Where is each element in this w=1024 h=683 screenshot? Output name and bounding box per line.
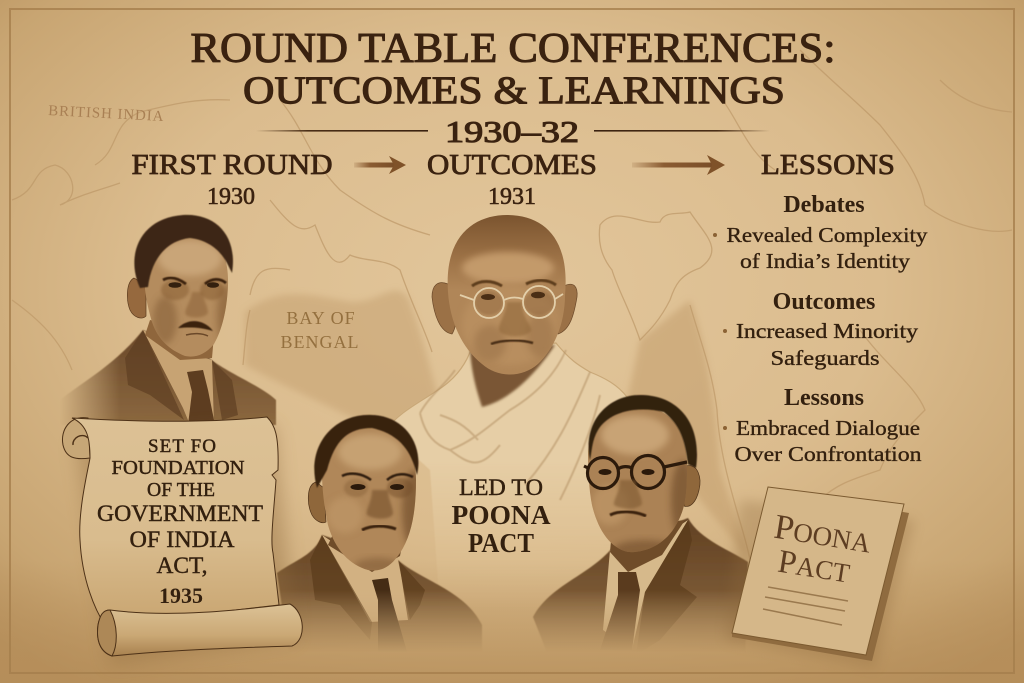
arrow: outcomes to lessons	[632, 155, 725, 175]
head	[588, 407, 687, 552]
callout: Led to Poona Pact: LED TO	[459, 475, 543, 500]
scroll text: 1935	[159, 583, 203, 608]
face highlights and shadows	[158, 240, 222, 276]
document lines	[763, 587, 848, 625]
head	[448, 215, 566, 374]
face highlights and shadows	[338, 434, 402, 470]
moustache and mouth	[178, 321, 213, 331]
date subtitle with rules: 1930–32	[445, 114, 579, 149]
lesson: debates: of India’s Identity	[740, 249, 911, 273]
map label: Bay of Bengal: BENGAL	[280, 332, 360, 352]
callout: Led to Poona Pact: POONA	[452, 500, 551, 530]
map label: Bay of Bengal	[280, 308, 360, 352]
face highlights and shadows	[601, 415, 669, 455]
lesson: lessons	[723, 385, 922, 466]
neck	[610, 520, 685, 572]
scroll text: FOUNDATION	[112, 457, 244, 479]
scroll text	[97, 436, 263, 608]
portrait: Gandhi	[394, 215, 627, 543]
column heading: First Round: FIRST ROUND	[132, 149, 332, 181]
neck	[145, 320, 214, 360]
map label: British India: BRITISH INDIA	[48, 103, 165, 125]
hair	[589, 395, 697, 468]
column heading: Outcomes	[427, 149, 597, 210]
suit	[60, 330, 276, 425]
hair	[134, 215, 233, 288]
ear	[308, 482, 326, 523]
portrait: First Round delegate	[60, 215, 276, 425]
scroll text: OF INDIA	[130, 527, 235, 552]
brows and eyes	[342, 474, 413, 480]
document front page	[732, 487, 904, 655]
shirt and collar	[143, 330, 214, 425]
hair	[314, 415, 418, 488]
map label: Bay of Bengal: BAY OF	[286, 308, 356, 328]
map shading: right landmass	[625, 300, 750, 560]
callout: Led to Poona Pact	[452, 475, 551, 558]
document: Poona Pact	[725, 487, 915, 668]
eyes	[598, 469, 612, 475]
document back page	[732, 490, 909, 661]
scroll shadow	[75, 425, 295, 665]
lesson: lessons: Lessons	[784, 385, 864, 411]
lapels	[310, 535, 425, 640]
top curl	[62, 418, 90, 459]
scroll: Government of India Act	[62, 417, 302, 665]
column heading: First Round	[132, 149, 332, 210]
column heading: Outcomes: 1931	[488, 184, 536, 210]
portrait: left delegate	[277, 415, 482, 660]
document shadow	[725, 500, 915, 668]
glasses	[460, 286, 563, 318]
nose and mouth	[367, 490, 393, 519]
ear	[684, 466, 700, 506]
column heading: Lessons: LESSONS	[761, 149, 895, 181]
lesson: outcomes	[723, 289, 919, 370]
nose and mouth	[499, 302, 531, 336]
lesson: outcomes: Outcomes	[773, 289, 875, 315]
head	[144, 230, 228, 357]
map shading: Bay of Bengal region	[245, 291, 448, 440]
tie	[187, 370, 214, 421]
glasses	[584, 456, 687, 488]
nose and mouth	[614, 480, 642, 509]
lesson: debates: Revealed Complexity	[726, 223, 928, 247]
portrait: right delegate	[533, 395, 748, 660]
lesson: lessons: Over Confrontation	[734, 442, 922, 466]
bottom roll	[98, 604, 302, 656]
title: ROUND TABLE CONFERENCES:	[190, 26, 836, 72]
faded map of India	[12, 50, 1012, 560]
shirt	[322, 535, 408, 622]
brows and eyes	[163, 278, 226, 284]
ears	[432, 283, 456, 334]
lessons list	[713, 192, 928, 466]
lapels	[125, 330, 238, 420]
tie	[372, 578, 404, 644]
document title: POONA	[772, 507, 874, 561]
lesson: outcomes: Safeguards	[770, 346, 880, 370]
scroll text: SET FO	[148, 436, 216, 457]
lapels	[639, 520, 697, 636]
document title: PACT	[775, 544, 853, 591]
neck	[328, 530, 405, 572]
face highlights and shadows	[462, 252, 554, 284]
lesson: outcomes: Increased Minority	[736, 319, 919, 343]
head	[322, 427, 416, 570]
neck shadow	[470, 345, 555, 407]
tie	[604, 572, 640, 648]
suit	[532, 518, 748, 644]
suit	[276, 534, 482, 644]
scroll text: OF THE	[147, 479, 215, 501]
shirt	[603, 520, 688, 650]
scroll text: GOVERNMENT	[97, 501, 263, 526]
bottom shading	[0, 560, 1024, 683]
title: OUTCOMES & LEARNINGS	[243, 69, 785, 112]
title	[190, 26, 836, 112]
column heading: Outcomes: OUTCOMES	[427, 149, 597, 181]
scroll body	[72, 417, 279, 625]
scroll text: ACT,	[156, 553, 208, 578]
shawl	[384, 343, 655, 610]
ear	[127, 278, 146, 318]
nose	[185, 292, 208, 317]
lesson: debates: Debates	[783, 192, 865, 218]
column heading: First Round: 1930	[207, 184, 255, 210]
brows and eyes	[472, 280, 556, 286]
lesson: lessons: Embraced Dialogue	[736, 416, 920, 440]
lesson: debates	[713, 192, 928, 273]
arrow: first round to outcomes	[354, 156, 406, 174]
callout: Led to Poona Pact: PACT	[468, 528, 534, 558]
document title	[766, 507, 874, 593]
